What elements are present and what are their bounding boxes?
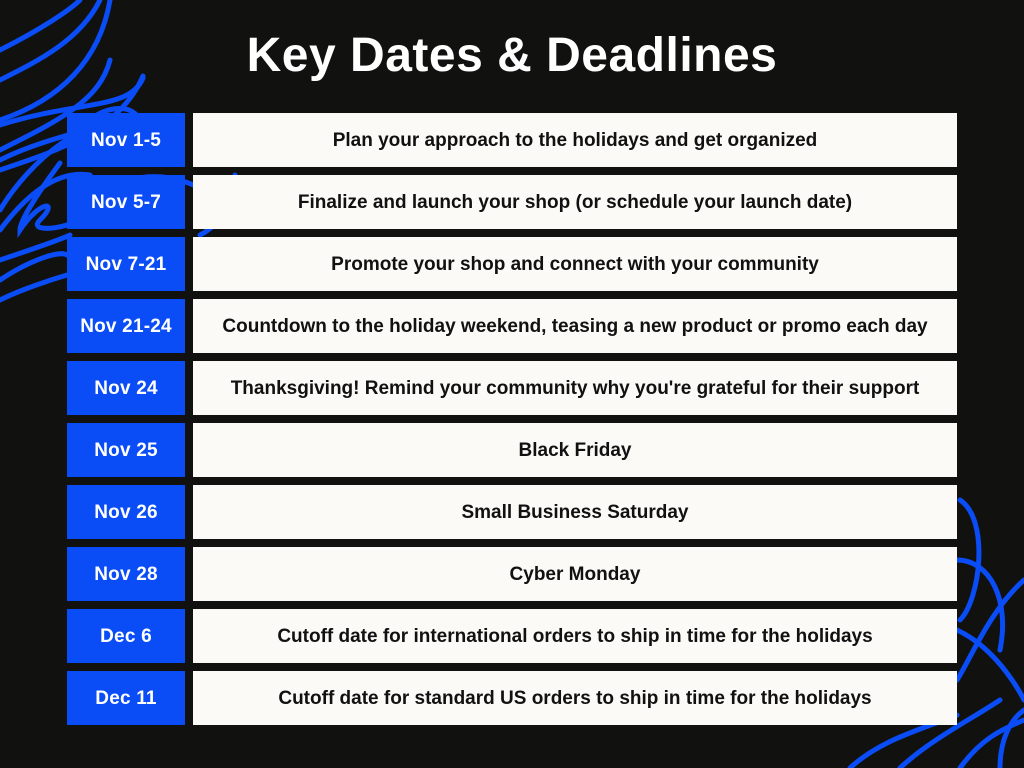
- row: Dec 11: [67, 671, 957, 725]
- row: Nov 1-5: [67, 113, 957, 167]
- row: Nov 5-7: Nov 5-7: [91, 192, 161, 212]
- row: Nov 28: Nov 28: [94, 564, 158, 584]
- row: Nov 1-5: Plan your approach to the holidays and get organized: [333, 130, 817, 151]
- row: Nov 25: Nov 25: [94, 440, 158, 460]
- row: Dec 11: Cutoff date for standard US orders to ship in time for the holidays: [278, 688, 872, 709]
- row: Dec 11: Dec 11: [95, 688, 157, 708]
- row: Nov 26: Nov 26: [94, 502, 158, 522]
- row: Nov 1-5: Nov 1-5: [91, 130, 161, 150]
- row: Nov 7-21: [67, 237, 957, 291]
- row: Nov 26: Small Business Saturday: [461, 502, 689, 523]
- row: Dec 6: Cutoff date for international orders to ship in time for the holidays: [277, 626, 873, 647]
- row: Dec 6: [67, 609, 957, 663]
- row: Nov 7-21: Promote your shop and connect with your community: [331, 254, 819, 275]
- row: Nov 24: Thanksgiving! Remind your community why you're grateful for their support: [231, 378, 919, 399]
- row: Nov 21-24: [67, 299, 957, 353]
- row: Nov 24: [67, 361, 957, 415]
- title: Key Dates & Deadlines: [247, 29, 777, 82]
- row: Dec 6: Dec 6: [100, 626, 152, 646]
- row: Nov 5-7: Finalize and launch your shop (or schedule your launch date): [298, 192, 852, 213]
- row: Nov 21-24: Nov 21-24: [80, 316, 172, 336]
- row: Nov 21-24: Countdown to the holiday weekend, teasing a new product or promo each day: [222, 316, 928, 337]
- row: Nov 25: Black Friday: [518, 440, 632, 461]
- row: Nov 26: [67, 485, 957, 539]
- row: Nov 24: Nov 24: [94, 378, 158, 398]
- row: Nov 7-21: Nov 7-21: [86, 254, 166, 274]
- row: Nov 28: [67, 547, 957, 601]
- row: Nov 25: [67, 423, 957, 477]
- row: Nov 5-7: [67, 175, 957, 229]
- row: Nov 28: Cyber Monday: [510, 564, 640, 585]
